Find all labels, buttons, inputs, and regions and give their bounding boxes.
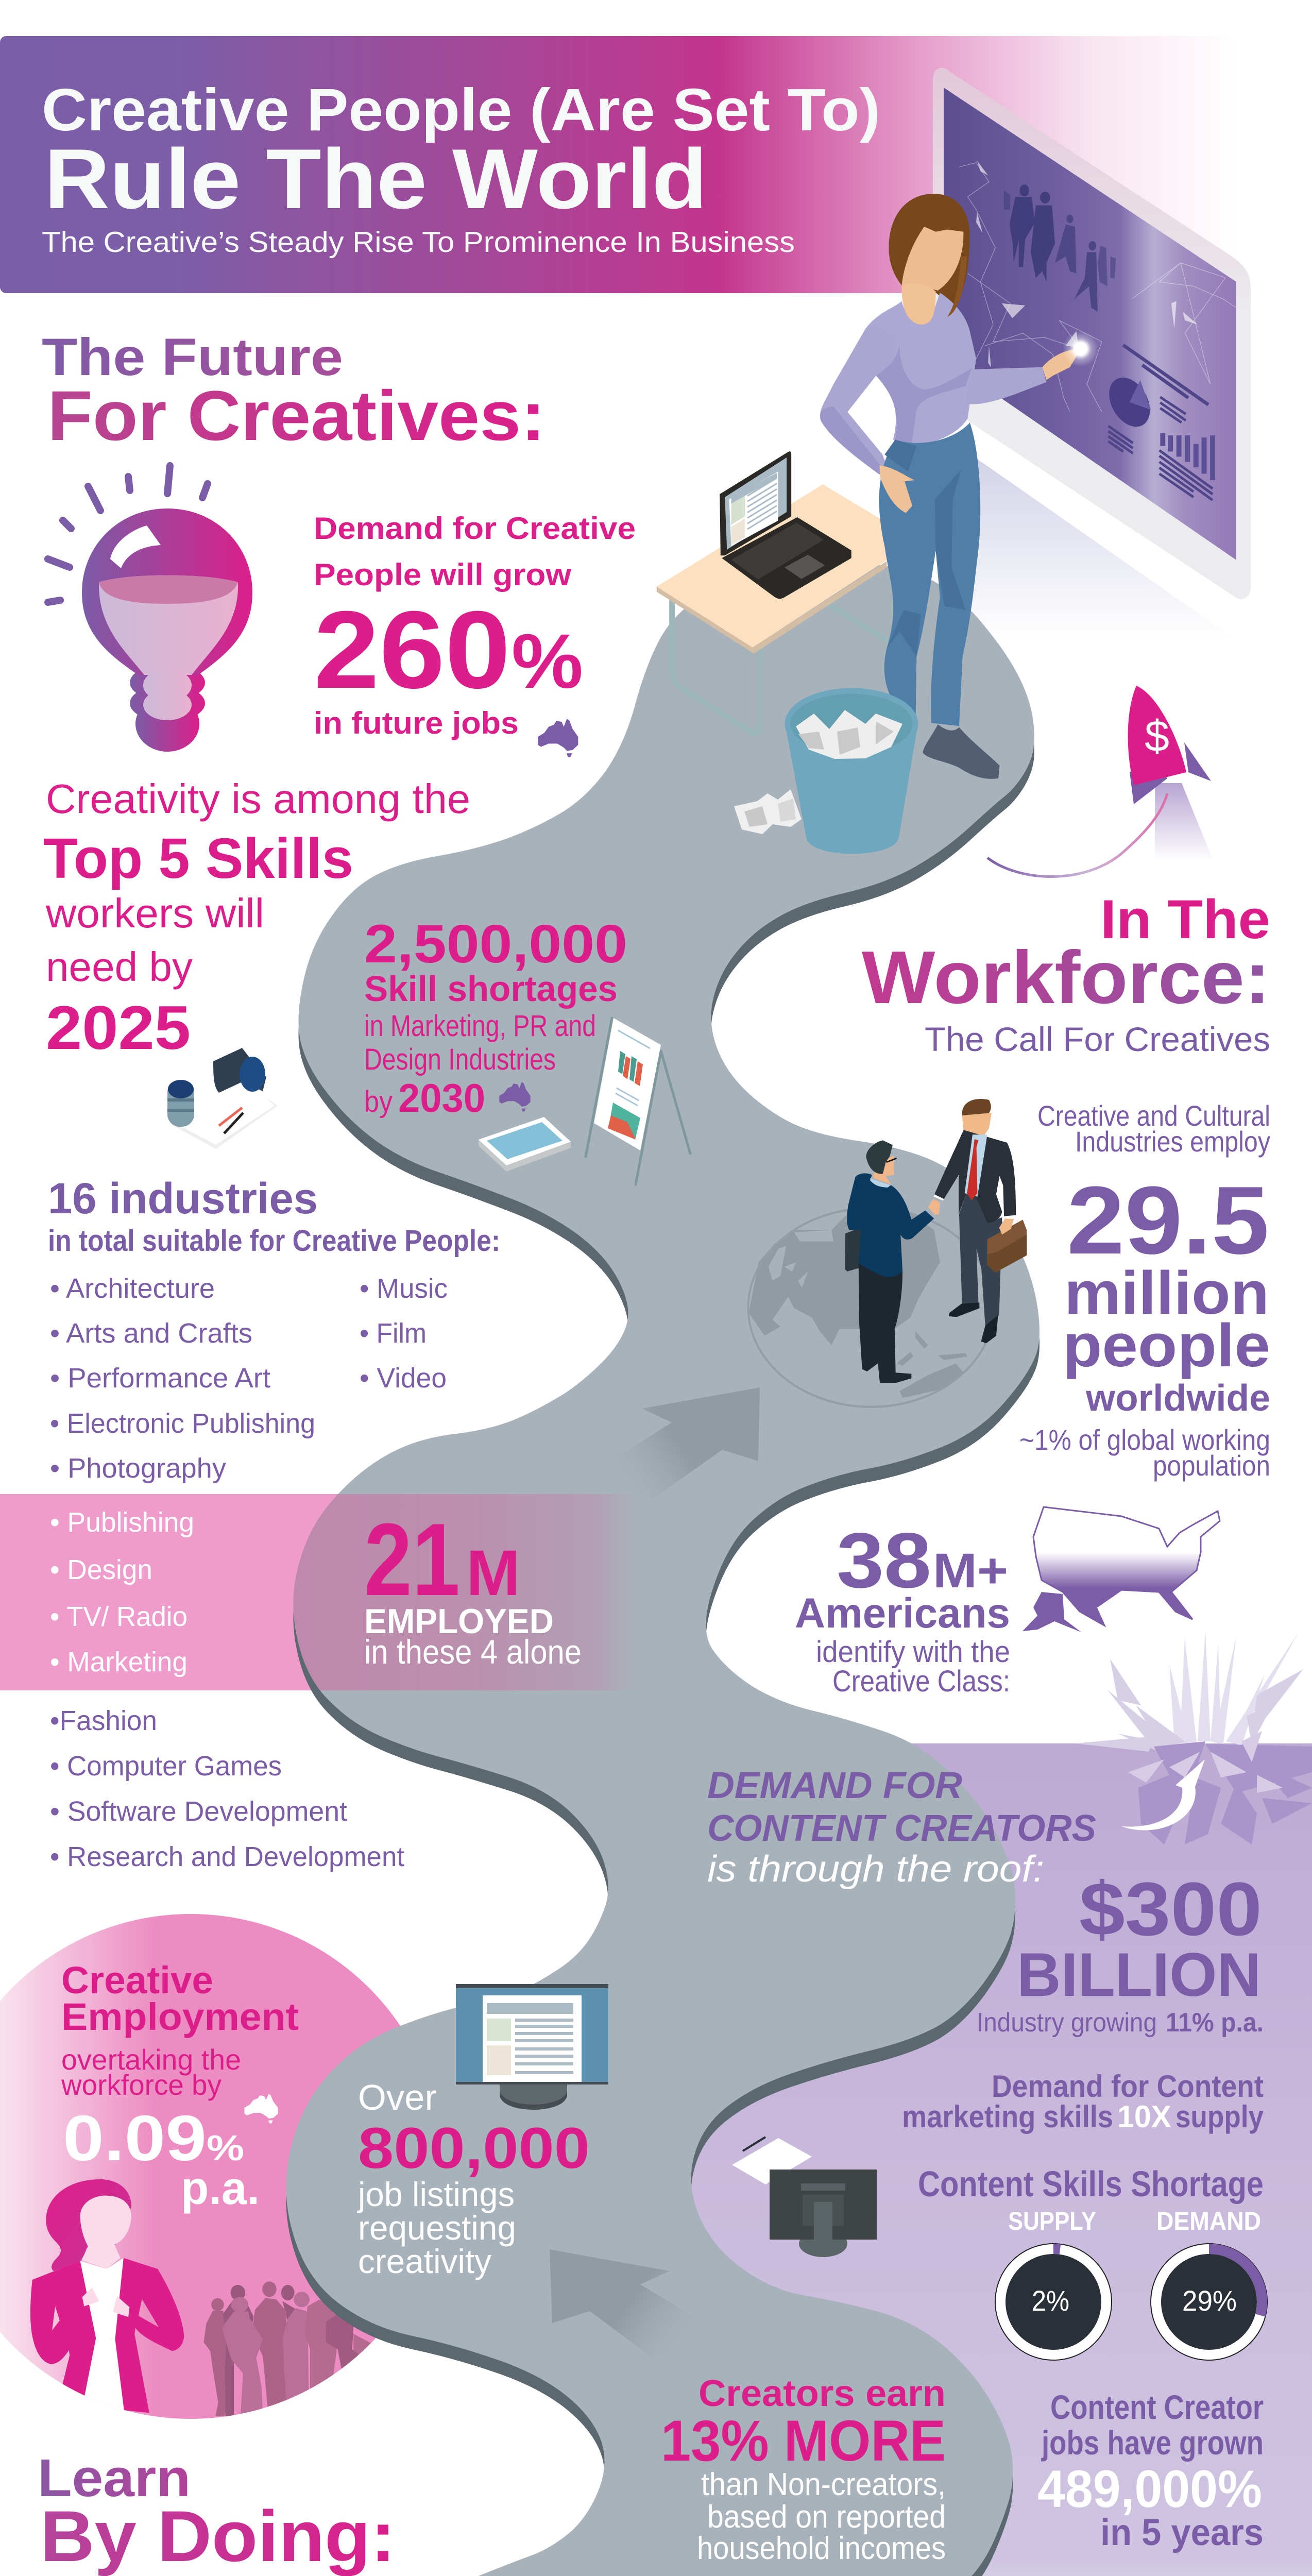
stat: content creator jobs <box>1037 2388 1264 2553</box>
stat: skill shortages: Skill shortages <box>364 969 618 1009</box>
stat: 29.5 million people: population <box>1153 1449 1270 1482</box>
stat: demand for content creators: $300 <box>1079 1867 1262 1952</box>
list: 16 industries: • Performance Art <box>50 1363 270 1394</box>
woman skin <box>879 349 1081 513</box>
heading: future for creatives: For Creatives: <box>47 377 546 455</box>
stat: content creator jobs: Content Creator <box>1050 2388 1264 2426</box>
stat: 800,000 job listings: requesting <box>358 2209 516 2247</box>
stat: 38M+ Americans: identify with the <box>816 1635 1010 1669</box>
man with briefcase <box>934 1130 1027 1343</box>
stat: demand 260% <box>314 511 636 740</box>
content creators purple panel <box>644 1743 1312 2576</box>
stat: 38M+ Americans: M+ <box>933 1544 1008 1598</box>
text: top 5 skills: need by <box>46 944 193 990</box>
explosion shards <box>1075 1631 1312 1844</box>
winding grey path <box>279 561 1040 2576</box>
text: top 5 skills <box>43 776 470 1062</box>
stat: creative employment: % <box>207 2128 244 2168</box>
heading: in the workforce <box>862 888 1270 1058</box>
icon: light bulb <box>48 466 252 752</box>
title: The Creative’s Steady Rise To Prominence In Business <box>42 226 795 259</box>
header banner <box>0 36 1236 293</box>
stat: demand for content creators: marketing skills <box>902 2099 1113 2134</box>
left pink circle panel <box>0 1914 443 2419</box>
band tint over path <box>278 1494 636 1690</box>
stat: 29.5 million people: Industries employ <box>1075 1125 1270 1158</box>
chart: content skills shortage: DEMAND <box>1156 2207 1261 2235</box>
pink band behind four industries <box>0 1494 636 1690</box>
crumpled paper <box>734 789 802 834</box>
icon: desktop monitor back <box>732 2137 877 2257</box>
stat: creators earn more: 13% MORE <box>661 2409 946 2473</box>
stat: creative employment: workforce by <box>61 2069 221 2101</box>
list: four highlighted industries: • TV/ Radio <box>50 1601 188 1632</box>
stat: 21M employed: M <box>466 1537 520 1609</box>
list: four highlighted industries: • Design <box>50 1554 152 1585</box>
stat: creators earn more: household incomes <box>697 2531 946 2566</box>
list: remaining industries <box>50 1705 404 1872</box>
stat: 21M employed: in these 4 alone <box>364 1633 582 1671</box>
list: 16 industries: • Arts and Crafts <box>50 1318 252 1349</box>
rocket <box>987 686 1213 877</box>
icon: job listing monitor <box>456 1984 608 2110</box>
text: top 5 skills: Creativity is among the <box>46 776 470 822</box>
stat: demand 260%: % <box>512 618 583 704</box>
list: remaining industries: • Software Development <box>50 1796 347 1827</box>
icon: screen pie chart <box>1101 370 1158 434</box>
stat: demand for content creators: 10X <box>1117 2099 1171 2134</box>
stat: 38M+ Americans: Americans <box>795 1590 1010 1637</box>
big touch screen <box>933 68 1251 599</box>
stat: demand for content creators: Industry growing <box>977 2008 1157 2038</box>
stat: creators earn more: Creators earn <box>698 2373 946 2414</box>
stat: 21M employed: 21 <box>364 1502 460 1617</box>
floor shadow of big screen <box>972 453 1236 640</box>
stat: 29.5 million people: ~1% of global working <box>1019 1423 1270 1456</box>
icon: australia <box>538 719 578 757</box>
title: Rule The World <box>44 131 707 226</box>
list: 16 industries: 16 industries <box>48 1174 318 1223</box>
stat: 800,000 job listings: creativity <box>358 2242 491 2280</box>
list: 16 industries: • Music <box>360 1273 448 1304</box>
title: Creative People (Are Set To) <box>42 76 880 143</box>
heading: learn by doing: Learn <box>38 2448 191 2507</box>
map: USA <box>1023 1507 1220 1632</box>
icon: camera and notepad <box>167 1048 278 1149</box>
stat: content creator jobs: in 5 years <box>1100 2512 1264 2553</box>
stat: 800,000 job listings <box>357 2077 590 2280</box>
stat: creative employment: overtaking the <box>61 2043 241 2076</box>
list: remaining industries: •Fashion <box>50 1705 157 1736</box>
donut: demand 29%: 29% <box>1182 2284 1237 2317</box>
donut: supply 2% <box>995 2244 1112 2360</box>
stat: creative employment: p.a. <box>181 2163 260 2214</box>
donut: demand 29% <box>1151 2244 1267 2360</box>
stat: demand for content creators: is through the roof: <box>707 1849 1044 1890</box>
text: top 5 skills: 2025 <box>46 993 191 1062</box>
stat: content creator jobs: jobs have grown <box>1041 2424 1264 2462</box>
stat: creative employment <box>61 1959 299 2214</box>
icon: tablet <box>479 1117 571 1172</box>
stat: demand 260%: Demand for Creative <box>314 511 636 546</box>
stat: 800,000 job listings: job listings <box>357 2175 515 2213</box>
stat: creative employment: 0.09 <box>63 2103 207 2174</box>
stat: 29.5 million people: million <box>1064 1259 1269 1327</box>
list: 16 industries: in total suitable for Creative People: <box>48 1224 500 1258</box>
list: remaining industries: • Computer Games <box>50 1751 282 1782</box>
white swoosh arrow <box>1121 1759 1205 1831</box>
wastepaper bin <box>785 691 918 854</box>
stat: 29.5 million people: 29.5 <box>1067 1166 1269 1274</box>
stat: 29.5 million people: people <box>1063 1312 1270 1380</box>
list: 16 industries: • Film <box>360 1318 427 1349</box>
list: four highlighted industries: • Marketing <box>50 1647 188 1677</box>
stat: demand for content creators: Demand for Content <box>992 2069 1264 2104</box>
stat: creative employment: Creative <box>61 1959 213 2002</box>
stat: skill shortages <box>364 914 627 1121</box>
stat: skill shortages: 2,500,000 <box>364 914 627 974</box>
stat: demand 260%: in future jobs <box>314 706 519 740</box>
stat: 29.5 million people: worldwide <box>1085 1378 1270 1419</box>
desk with laptop <box>657 451 916 734</box>
icon: australia white <box>244 2094 278 2124</box>
heading: future for creatives <box>42 328 546 455</box>
stat: creators earn more: based on reported <box>707 2499 946 2535</box>
stat: 21M employed <box>364 1502 582 1671</box>
list: four highlighted industries <box>50 1507 194 1677</box>
stat: creators earn more: than Non-creators, <box>701 2467 946 2502</box>
stat: 29.5 million people <box>1019 1099 1270 1482</box>
icon: easel chart <box>586 1018 690 1184</box>
stat: skill shortages: 2030 <box>398 1075 485 1121</box>
title <box>42 76 880 259</box>
touch glow <box>1063 331 1098 367</box>
stat: 38M+ Americans: 38 <box>837 1517 931 1604</box>
stat: content creator jobs: 489,000% <box>1037 2460 1262 2518</box>
stat: demand for content creators: supply <box>1175 2099 1264 2134</box>
heading: learn by doing <box>38 2448 396 2576</box>
illustration: woman in pink jacket <box>30 2179 184 2421</box>
woman shoe <box>923 724 1000 779</box>
list: 16 industries: • Electronic Publishing <box>50 1408 315 1439</box>
stat: skill shortages: by <box>364 1085 393 1118</box>
list: 16 industries: • Video <box>360 1363 447 1394</box>
stat: 38M+ Americans <box>795 1517 1010 1698</box>
crowd silhouettes <box>204 2281 371 2416</box>
stat: skill shortages: Design Industries <box>364 1043 556 1076</box>
stat: 38M+ Americans: Creative Class: <box>832 1665 1010 1698</box>
stat: demand for content creators: 11% p.a. <box>1166 2008 1264 2038</box>
stat: creators earn more <box>661 2373 946 2566</box>
illustration: businessmen handshake <box>845 1099 1027 1383</box>
stat: demand for content creators: CONTENT CREATORS <box>707 1808 1096 1849</box>
stat: creative employment: Employment <box>61 1995 299 2038</box>
heading: future for creatives: The Future <box>42 328 343 386</box>
stat: 21M employed: EMPLOYED <box>364 1602 554 1641</box>
man with sweater <box>845 1140 940 1383</box>
stat: 29.5 million people: Creative and Cultural <box>1037 1099 1270 1132</box>
stat: 800,000 job listings: 800,000 <box>358 2116 590 2180</box>
heading: learn by doing: By Doing: <box>40 2496 396 2576</box>
woman jeans <box>879 422 980 726</box>
list: four highlighted industries: • Publishing <box>50 1507 194 1538</box>
list: 16 industries: • Architecture <box>50 1273 215 1304</box>
rocket: $ <box>1145 712 1169 761</box>
stat: demand for content creators: BILLION <box>1017 1940 1261 2009</box>
standing woman <box>820 194 1098 779</box>
icon: australia small <box>499 1082 531 1112</box>
text: top 5 skills: workers will <box>45 890 264 936</box>
chart: content skills shortage: SUPPLY <box>1008 2207 1096 2235</box>
list: 16 industries <box>48 1174 500 1484</box>
globe on path <box>748 1208 994 1407</box>
heading: in the workforce: Workforce: <box>862 936 1270 1019</box>
text: top 5 skills: Top 5 Skills <box>43 827 353 890</box>
stat: demand for content creators: DEMAND FOR <box>707 1765 962 1806</box>
icon: laptop <box>720 451 851 599</box>
donut: supply 2%: 2% <box>1032 2284 1069 2317</box>
woman torso <box>865 293 976 446</box>
upward arrow on path <box>594 1387 760 1499</box>
list: remaining industries: • Research and Development <box>50 1841 404 1872</box>
chart: content skills shortage <box>918 2164 1267 2360</box>
stat: skill shortages: in Marketing, PR and <box>364 1009 596 1043</box>
heading: in the workforce: In The <box>1100 888 1270 950</box>
heading: in the workforce: The Call For Creatives <box>925 1020 1270 1058</box>
stat: demand 260%: People will grow <box>314 557 571 592</box>
stat: demand 260%: 260 <box>314 588 510 711</box>
list: 16 industries: • Photography <box>50 1453 226 1484</box>
arrow pointing to job listings <box>550 2249 720 2358</box>
stat: 800,000 job listings: Over <box>358 2077 437 2117</box>
stat: demand for content creators <box>707 1765 1264 2134</box>
